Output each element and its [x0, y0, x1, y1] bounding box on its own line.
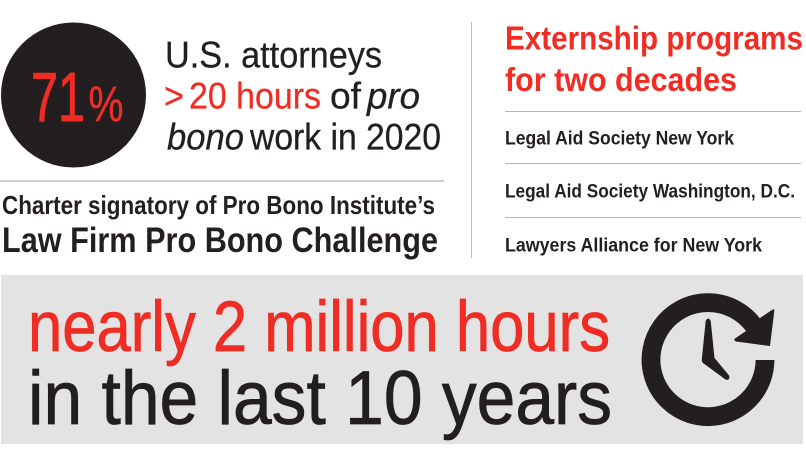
heading: externship programs: for two decades	[505, 61, 737, 98]
heading: externship programs	[505, 20, 803, 98]
text block: attorneys statistic: pro	[366, 76, 420, 116]
panel: hours banner	[1, 275, 803, 444]
text block: attorneys statistic: of	[330, 76, 362, 116]
text block: attorneys statistic: >	[164, 76, 184, 116]
stat badge: 71%: %	[88, 76, 124, 132]
text block: attorneys statistic: 20 hours	[189, 76, 321, 116]
list: externship partners	[505, 127, 795, 256]
list: externship partners: Lawyers Alliance for New York	[505, 234, 762, 256]
headline: in the last 10 years: in the last 10 years	[28, 356, 612, 441]
text block: attorneys statistic: work in 2020	[249, 116, 441, 158]
text block: charter signatory: Charter signatory of Pro Bono Institute’s	[2, 190, 435, 220]
icon: clock with circular arrow	[651, 303, 774, 417]
stat badge: 71%: 71	[31, 58, 85, 136]
text block: attorneys statistic: bono	[167, 116, 244, 158]
text block: attorneys statistic	[164, 34, 441, 158]
text block: charter signatory	[2, 190, 438, 260]
list: externship partners: Legal Aid Society New York	[505, 127, 734, 149]
text block: charter signatory: Law Firm Pro Bono Challenge	[2, 221, 438, 260]
stat badge: 71%	[1, 22, 146, 168]
headline: nearly 2 million hours: nearly 2 million hours	[28, 288, 610, 367]
text block: attorneys statistic: U.S. attorneys	[165, 34, 382, 76]
